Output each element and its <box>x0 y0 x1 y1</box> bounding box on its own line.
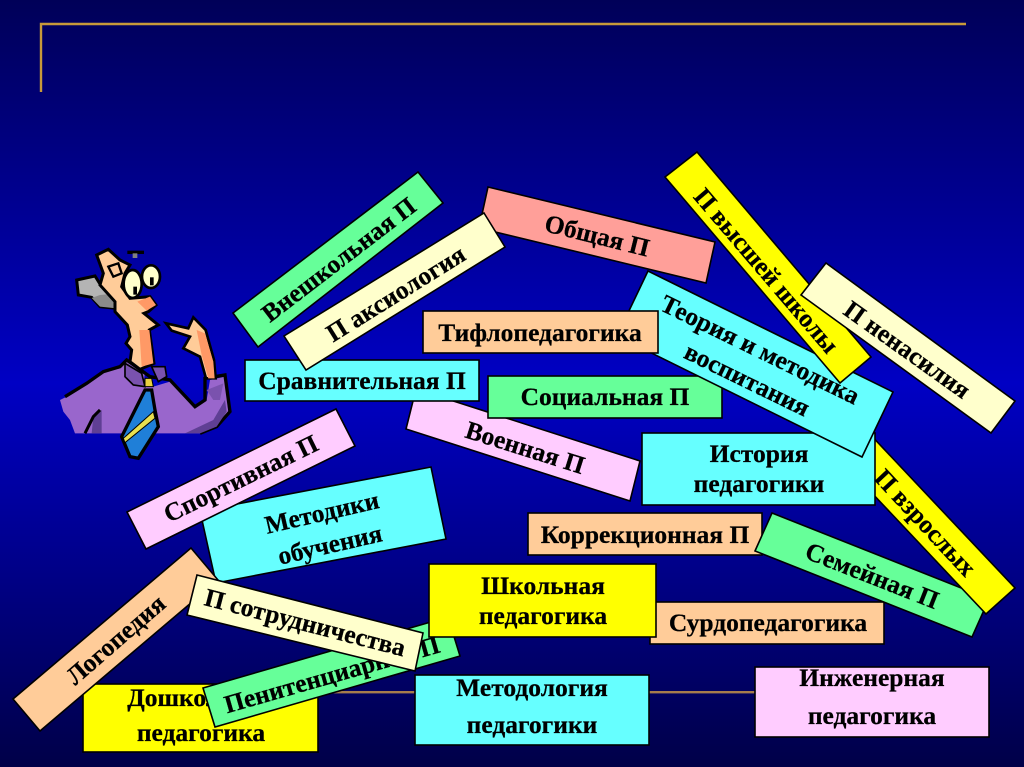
card: Инженерная педагогика: Инженерная <box>799 663 945 692</box>
card: Школьная педагогика: педагогика <box>479 601 607 630</box>
card: П аксиология: П аксиология <box>321 239 471 348</box>
card: Теория и методика воспитания: воспитания <box>680 337 815 422</box>
card: Сравнительная П <box>245 360 479 401</box>
card: Методики обучения: Методики <box>262 485 382 540</box>
card: Общая П <box>479 187 715 283</box>
card: Семейная П <box>755 513 989 637</box>
card: Социальная П <box>488 376 722 418</box>
card: П высшей школы: П высшей школы <box>688 182 845 359</box>
card: П ненасилия <box>801 263 1015 433</box>
card: Дошкольная педагогика: педагогика <box>137 718 265 747</box>
card: Сурдопедагогика <box>650 602 884 644</box>
card: Тифлопедагогика: Тифлопедагогика <box>438 318 642 347</box>
card: Сравнительная П: Сравнительная П <box>258 366 466 395</box>
card: Инженерная педагогика: педагогика <box>808 701 936 730</box>
gold frame lines <box>41 24 966 92</box>
card: Дошкольная педагогика: Дошкольная <box>127 683 275 712</box>
card: Инженерная педагогика <box>755 663 989 737</box>
card: Логопедия <box>13 548 218 731</box>
card: Семейная П: Семейная П <box>801 536 943 615</box>
card: Методики обучения <box>200 467 446 583</box>
card: П аксиология <box>284 213 505 370</box>
card: П взрослых: П взрослых <box>869 463 982 582</box>
card: Военная П <box>406 389 640 501</box>
card: Методология педагогики: Методология <box>456 673 608 702</box>
card: Коррекционная П <box>528 513 762 555</box>
card: П взрослых <box>837 430 1015 614</box>
bottom line <box>318 691 756 693</box>
card: Пенитенциарная П: Пенитенциарная П <box>221 630 443 719</box>
card: П ненасилия: П ненасилия <box>838 295 976 405</box>
card: Социальная П: Социальная П <box>521 382 690 411</box>
card: Школьная педагогика <box>429 564 656 637</box>
card: Спортивная П: Спортивная П <box>159 429 323 528</box>
card: Военная П: Военная П <box>462 415 588 480</box>
card: Методики обучения: обучения <box>275 518 385 571</box>
card: Теория и методика воспитания: Теория и методика <box>656 289 865 410</box>
card: История педагогики <box>642 433 875 505</box>
card: Внешкольная П: Внешкольная П <box>256 191 422 328</box>
card: Дошкольная педагогика <box>83 683 318 752</box>
card: Внешкольная П <box>233 172 443 347</box>
card: П высшей школы <box>665 152 871 383</box>
icon: pixel-art professor pointing <box>60 249 230 458</box>
card: Теория и методика воспитания <box>617 271 893 457</box>
card: Спортивная П <box>127 409 355 549</box>
card: Коррекционная П: Коррекционная П <box>541 520 749 549</box>
card: Школьная педагогика: Школьная <box>481 571 605 600</box>
card: Общая П: Общая П <box>542 209 653 263</box>
card: Тифлопедагогика <box>423 311 658 353</box>
card: П сотрудничества: П сотрудничества <box>202 583 409 662</box>
card: История педагогики: История <box>710 439 809 468</box>
card: Методология педагогики <box>415 673 649 745</box>
card: История педагогики: педагогики <box>694 469 825 498</box>
card: Методология педагогики: педагогики <box>467 710 598 739</box>
card: Логопедия: Логопедия <box>60 589 171 691</box>
card: Сурдопедагогика: Сурдопедагогика <box>669 608 867 637</box>
